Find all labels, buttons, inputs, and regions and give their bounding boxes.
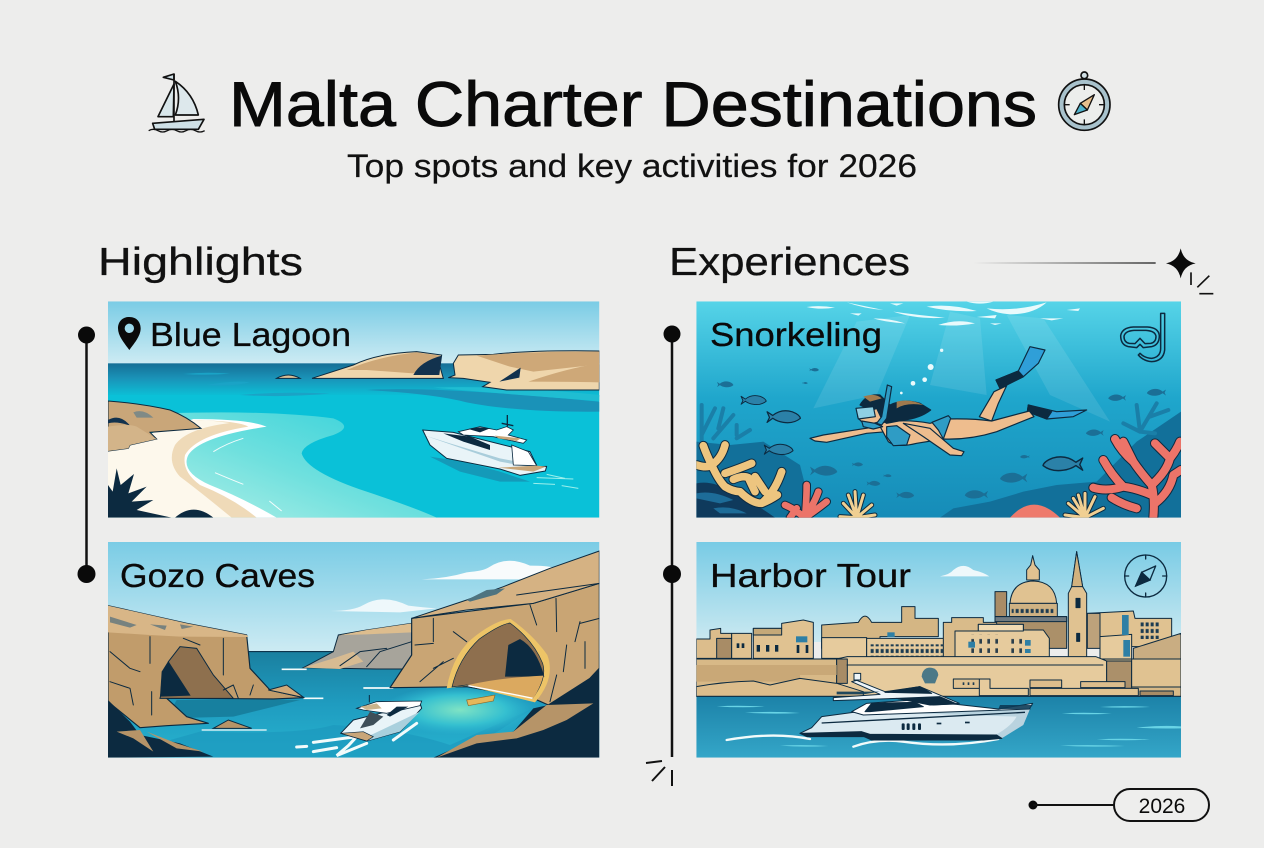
infographic canvas	[78, 71, 1214, 822]
yacht	[800, 673, 1033, 740]
yacht	[423, 415, 547, 475]
illustration: sea caves with yacht	[108, 542, 599, 758]
icon: map pin	[118, 317, 141, 350]
panel: Harbor Tour	[696, 542, 1181, 758]
snorkeler	[810, 347, 1087, 456]
panel: Blue Lagoon	[108, 301, 599, 518]
timeline: experiences	[646, 326, 681, 786]
yacht	[341, 695, 422, 741]
illustration: Valletta harbor skyline	[696, 542, 1181, 758]
year badge	[1028, 789, 1209, 821]
subtitle: Top spots and key activities for 2026	[347, 148, 917, 184]
timeline: highlights	[78, 326, 96, 583]
label: Harbor Tour: Harbor Tour	[710, 557, 911, 594]
header	[149, 70, 1110, 184]
left cliff	[108, 606, 304, 730]
illustration: lagoon with yacht	[108, 301, 599, 518]
icon: snorkel mask	[1121, 313, 1165, 362]
label: Snorkeling: Snorkeling	[710, 316, 882, 353]
panel: Gozo Caves	[108, 542, 599, 758]
panel: Snorkeling	[696, 301, 1181, 518]
icon: compass rose	[1125, 555, 1167, 597]
section heading: Highlights: Highlights	[98, 241, 303, 284]
icon: sailboat	[149, 74, 205, 132]
year badge: 2026	[1139, 795, 1185, 818]
skyline	[696, 552, 1181, 660]
section heading: Experiences: Experiences	[669, 241, 910, 284]
window rows	[737, 607, 1160, 656]
wake	[727, 736, 998, 747]
label: Gozo Caves: Gozo Caves	[120, 557, 315, 594]
title: Malta Charter Destinations	[229, 70, 1037, 140]
corals	[696, 439, 1181, 518]
label: Blue Lagoon: Blue Lagoon	[150, 316, 351, 353]
right cliff with cave	[390, 551, 599, 706]
water	[696, 696, 1181, 758]
background reef silhouette	[696, 403, 1181, 518]
fish	[717, 368, 1166, 499]
decoration: fading line with sparkle	[973, 248, 1213, 294]
illustration: underwater snorkeler	[696, 301, 1181, 518]
icon: compass	[1059, 72, 1110, 130]
harbor fortifications	[696, 657, 1181, 696]
